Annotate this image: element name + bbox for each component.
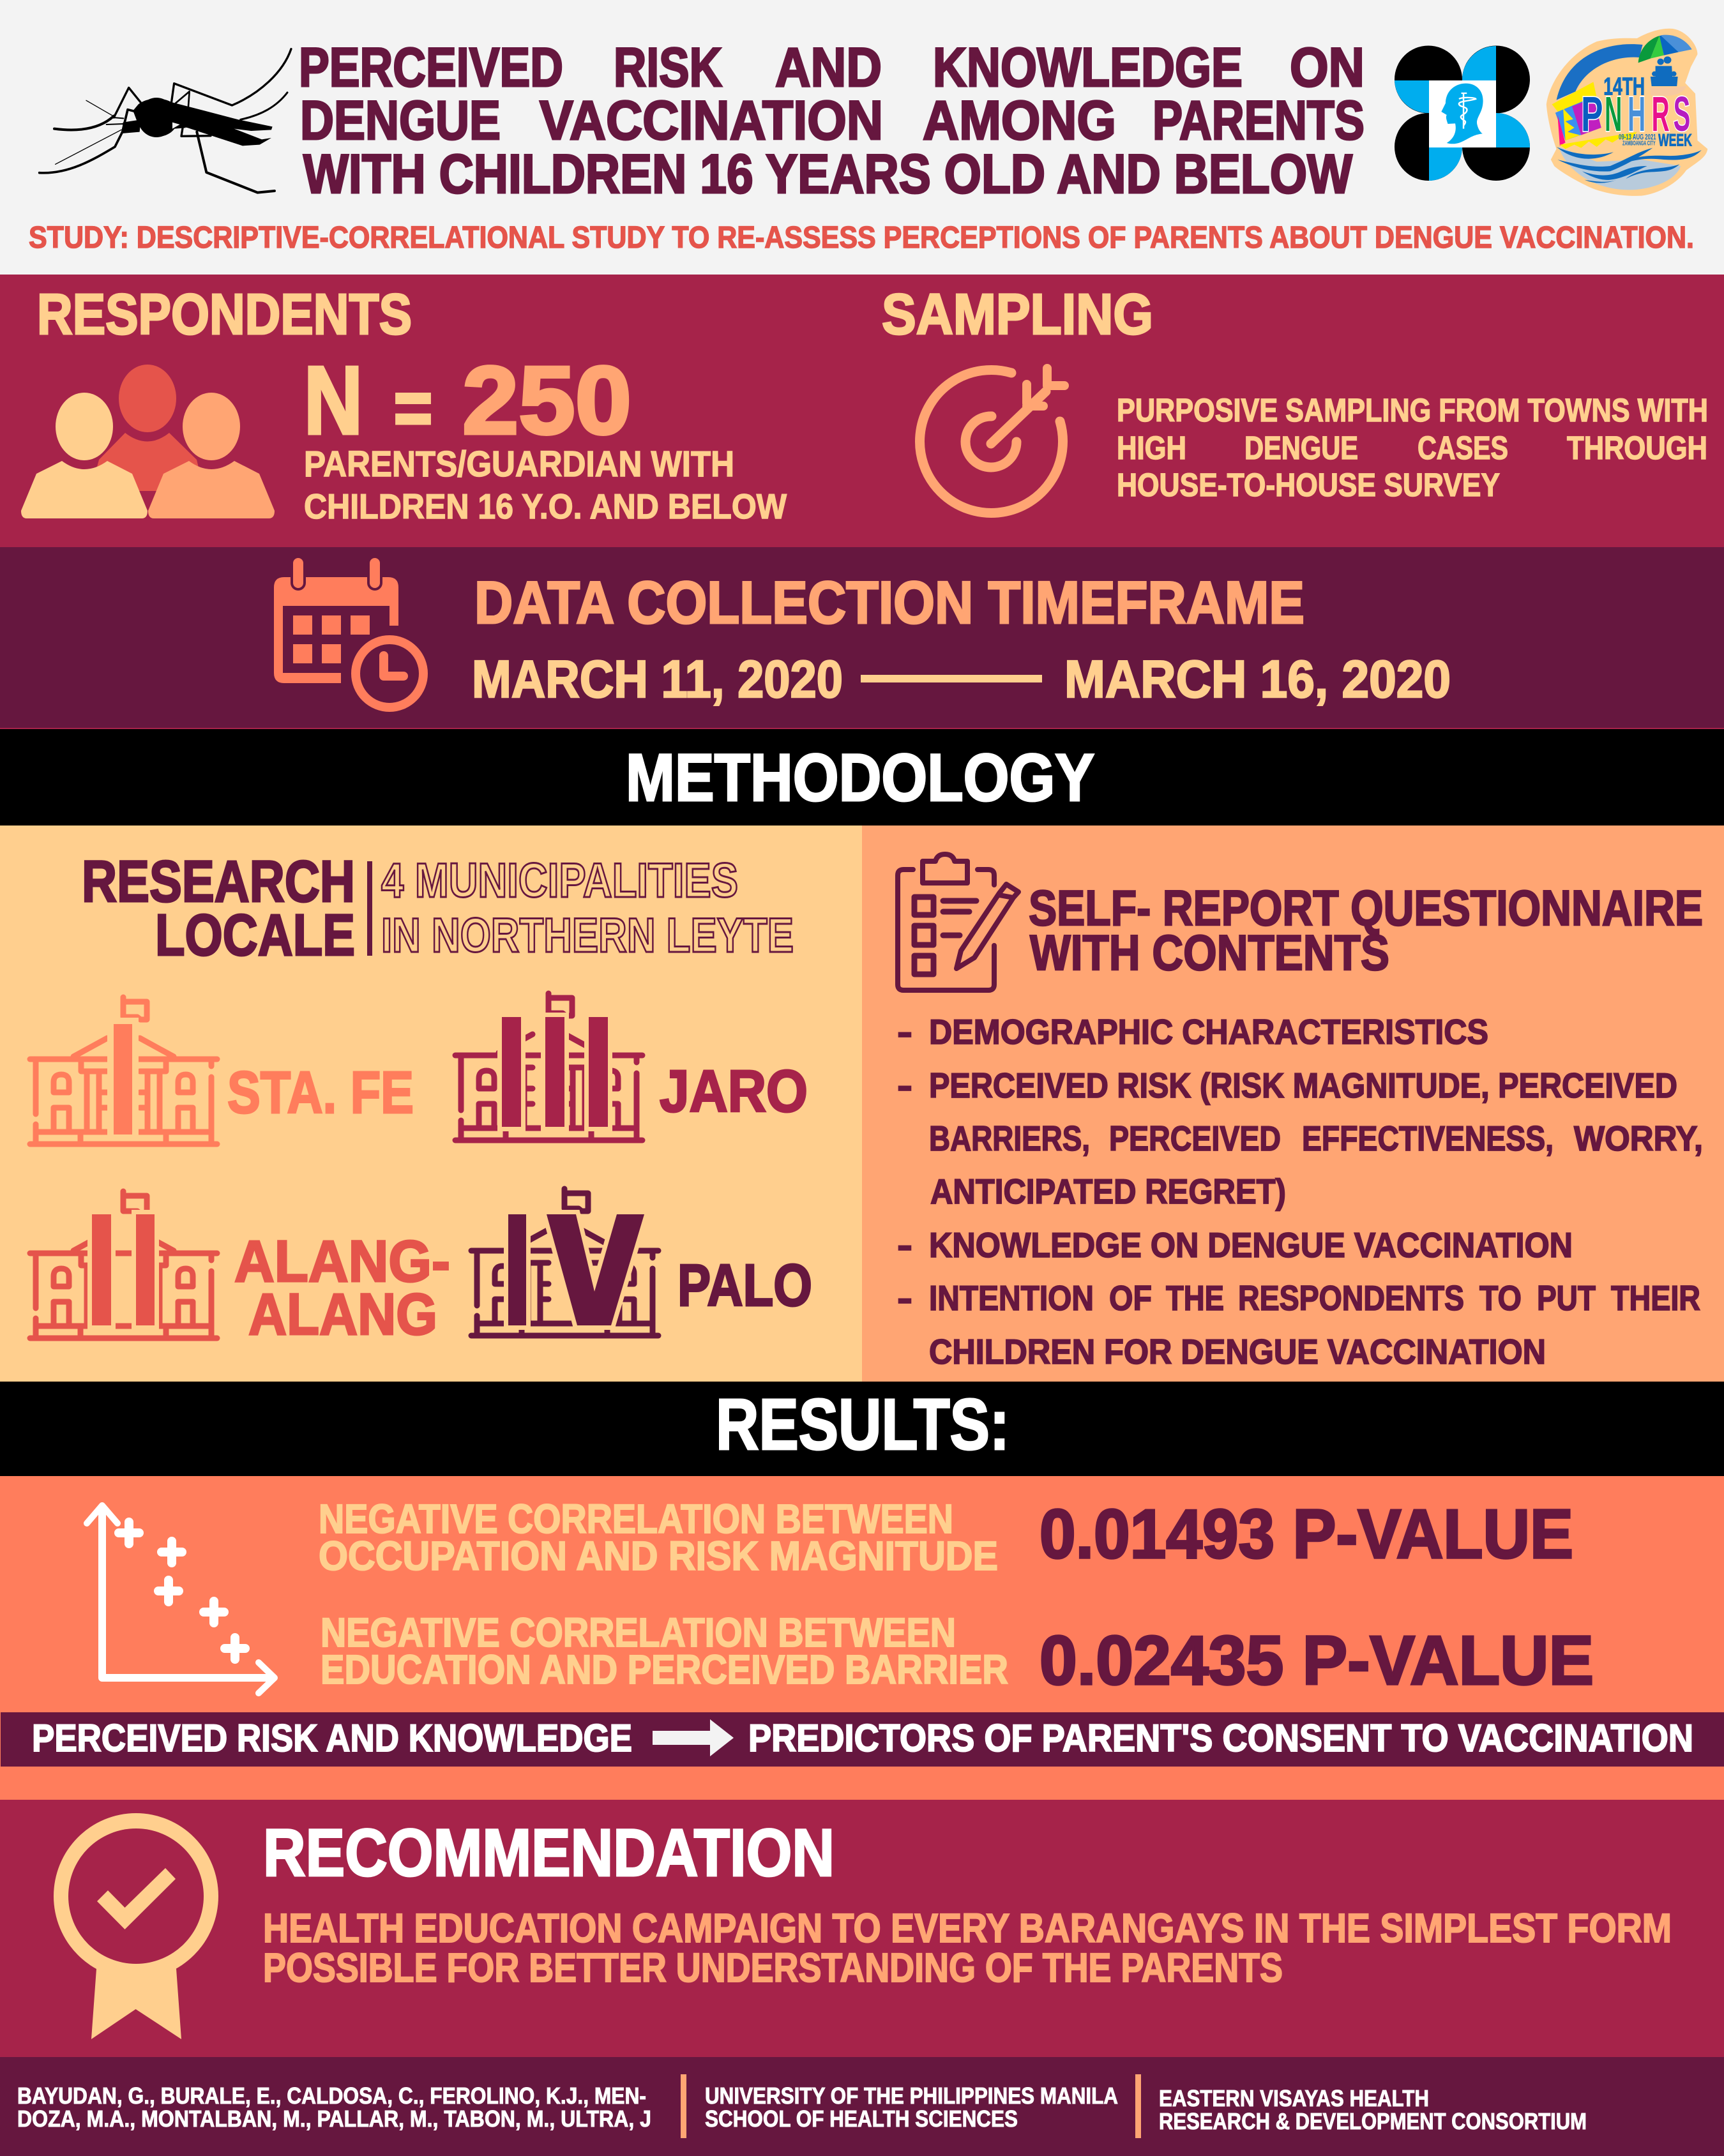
panel: research locale [0,825,862,1382]
icon: people [21,365,275,518]
list: questionnaire contents: CHILDREN FOR DENGUE VACCINATION [929,1332,1546,1371]
banner: results [0,1382,1724,1476]
text: 4 municipalities outlined: IN NORTHERN LEYTE [381,908,794,963]
icon: PNHRS week logo: R [1652,86,1670,142]
icon: building Sta. Fe [30,997,217,1144]
panel: results [0,1476,1724,1800]
text: sampling description: DENGUE [1244,430,1358,466]
arrow [653,1719,734,1756]
label: Palo: PALO [677,1252,812,1318]
stat: N = 250: 250 [462,346,631,454]
label: Alang-Alang [234,1229,450,1347]
text: correlation 2: EDUCATION AND PERCEIVED BARRIER [321,1647,1008,1692]
list: questionnaire contents: ANTICIPATED REGRET) [930,1172,1286,1211]
icon: mosquito [40,49,291,193]
text: 4 municipalities outlined: 4 MUNICIPALITIES [381,854,738,908]
icon: PNHRS week logo: P [1581,86,1603,142]
text: respondent description: PARENTS/GUARDIAN WITH [304,444,734,485]
text: respondent description: CHILDREN 16 Y.O. AND BELOW [304,486,787,526]
list: questionnaire contents: OF [1109,1278,1152,1318]
label: Sta. Fe: STA. FE [227,1059,414,1126]
label: Jaro: JARO [660,1058,808,1124]
stat: N = 250: = [394,365,432,451]
bar: predictors statement [1,1712,1724,1767]
text: university: UNIVERSITY OF THE PHILIPPINES MANILA [705,2083,1118,2109]
icon: PNHRS week logo: H [1628,86,1645,142]
list: questionnaire contents: BARRIERS, [929,1119,1090,1158]
text: sampling description [1117,392,1708,503]
icon: clipboard [898,854,1018,990]
title: PARENTS [1153,90,1365,151]
text: authors: DOZA, M.A., MONTALBAN, M., PALLAR, M., TABON, M., ULTRA, J [17,2106,651,2132]
list: questionnaire contents [897,1012,1703,1371]
icon: PNHRS week logo: S [1674,86,1690,142]
text: university [705,2083,1118,2132]
heading: data collection timeframe: DATA COLLECTION TIMEFRAME [474,569,1304,636]
text: consortium: RESEARCH & DEVELOPMENT CONSORTIUM [1159,2108,1587,2134]
text: recommendation body [263,1905,1672,1991]
icon: building Jaro [455,993,642,1140]
icon: PNHRS week logo: N [1605,86,1622,142]
text: respondent description [304,444,787,526]
text: correlation 2 [321,1609,1008,1692]
text: recommendation body: POSSIBLE FOR BETTER UNDERSTANDING OF THE PARENTS [263,1945,1283,1991]
icon: building Palo [471,1189,658,1336]
title: KNOWLEDGE [933,37,1243,98]
title: DENGUE [300,90,501,151]
stat: N = 250: N [304,346,363,454]
title [299,37,1365,205]
heading: self-report questionnaire: WITH CONTENTS [1030,924,1389,981]
text: correlation 1 [319,1496,998,1579]
title: AND [775,37,882,98]
stat: p-value 1: 0.01493 P-VALUE [1040,1495,1573,1573]
panel: respondents and sampling [0,275,1724,547]
icon: award ribbon [54,1813,218,2039]
list: questionnaire contents: RESPONDENTS [1238,1278,1464,1318]
text: correlation 1: OCCUPATION AND RISK MAGNITUDE [319,1533,998,1579]
title: RISK [614,37,722,98]
icon: building Alang-Alang [30,1191,217,1338]
list: questionnaire contents: DEMOGRAPHIC CHARACTERISTICS [929,1012,1488,1052]
list: questionnaire contents: - [897,1012,912,1052]
title: WITH CHILDREN 16 YEARS OLD AND BELOW [303,144,1353,205]
text: authors [17,2083,651,2132]
text: sampling description: HOUSE-TO-HOUSE SURVEY [1117,467,1500,503]
bar: predictors statement: PERCEIVED RISK AND KNOWLEDGE [32,1717,632,1760]
heading: research locale [82,849,372,968]
list: questionnaire contents: PERCEIVED [1109,1119,1281,1158]
text: authors: BAYUDAN, G., BURALE, E., CALDOSA, C., FEROLINO, K.J., MEN- [17,2083,646,2109]
heading: research locale: LOCALE [155,903,355,968]
panel: questionnaire [862,825,1724,1382]
banner: methodology: METHODOLOGY [626,741,1094,815]
title: PERCEIVED [299,37,563,98]
heading: recommendation: RECOMMENDATION [263,1816,835,1890]
list: questionnaire contents: INTENTION [929,1278,1094,1318]
icon: PNHRS week logo: 14TH [1603,73,1645,100]
text: 4 municipalities outlined [381,854,794,963]
list: questionnaire contents: THEIR [1611,1278,1700,1318]
banner: methodology [0,729,1724,825]
list: questionnaire contents: - [897,1278,912,1318]
text: sampling description: HIGH [1117,430,1186,466]
list: questionnaire contents: PUT [1537,1278,1596,1318]
panel: header [0,0,1724,275]
panel: footer [0,2057,1724,2156]
list: questionnaire contents: - [897,1225,912,1265]
list: questionnaire contents: EFFECTIVENESS, [1302,1119,1554,1158]
panel: data collection timeframe [0,547,1724,729]
icon: target [920,368,1064,513]
heading: research locale: RESEARCH [82,849,355,914]
text: date range: MARCH 11, 2020 [472,649,843,709]
title: ON [1290,37,1365,98]
text: date range: MARCH 16, 2020 [1064,649,1451,709]
heading: respondents: RESPONDENTS [37,283,412,347]
text: correlation 1: NEGATIVE CORRELATION BETWEEN [319,1496,953,1542]
text: consortium [1159,2085,1587,2134]
icon: DOH logo [1395,46,1530,181]
icon: PNHRS week logo: ZAMBOANGA CITY [1622,140,1656,147]
label: Alang-Alang: ALANG- [234,1229,450,1294]
label: Alang-Alang: ALANG [248,1282,437,1347]
stat: N = 250 [304,346,631,454]
icon: PNHRS week logo [1546,29,1707,196]
icon: scatter plot [87,1505,275,1693]
panel: recommendation [0,1800,1724,2057]
list: questionnaire contents: WORRY, [1574,1119,1703,1158]
title: VACCINATION [540,90,883,151]
title: AMONG [923,90,1116,151]
text: date range [472,649,1451,709]
icon: calendar with clock [274,555,423,707]
text: sampling description: CASES [1418,430,1508,466]
heading: self-report questionnaire [1029,880,1703,981]
list: questionnaire contents: KNOWLEDGE ON DENGUE VACCINATION [929,1225,1573,1265]
heading: sampling: SAMPLING [882,283,1153,347]
text: correlation 2: NEGATIVE CORRELATION BETWEEN [321,1609,956,1655]
list: questionnaire contents: THE [1166,1278,1224,1318]
list: questionnaire contents: - [897,1066,912,1105]
banner: results: RESULTS: [716,1384,1009,1465]
icon: PNHRS week logo: WEEK [1658,130,1692,149]
stat: p-value 2: 0.02435 P-VALUE [1040,1622,1594,1700]
text: consortium: EASTERN VISAYAS HEALTH [1159,2085,1429,2111]
icon: PNHRS week logo: 09-13 AUG 2021 [1619,133,1656,141]
text: university: SCHOOL OF HEALTH SCIENCES [705,2106,1018,2132]
list: questionnaire contents: TO [1479,1278,1522,1318]
